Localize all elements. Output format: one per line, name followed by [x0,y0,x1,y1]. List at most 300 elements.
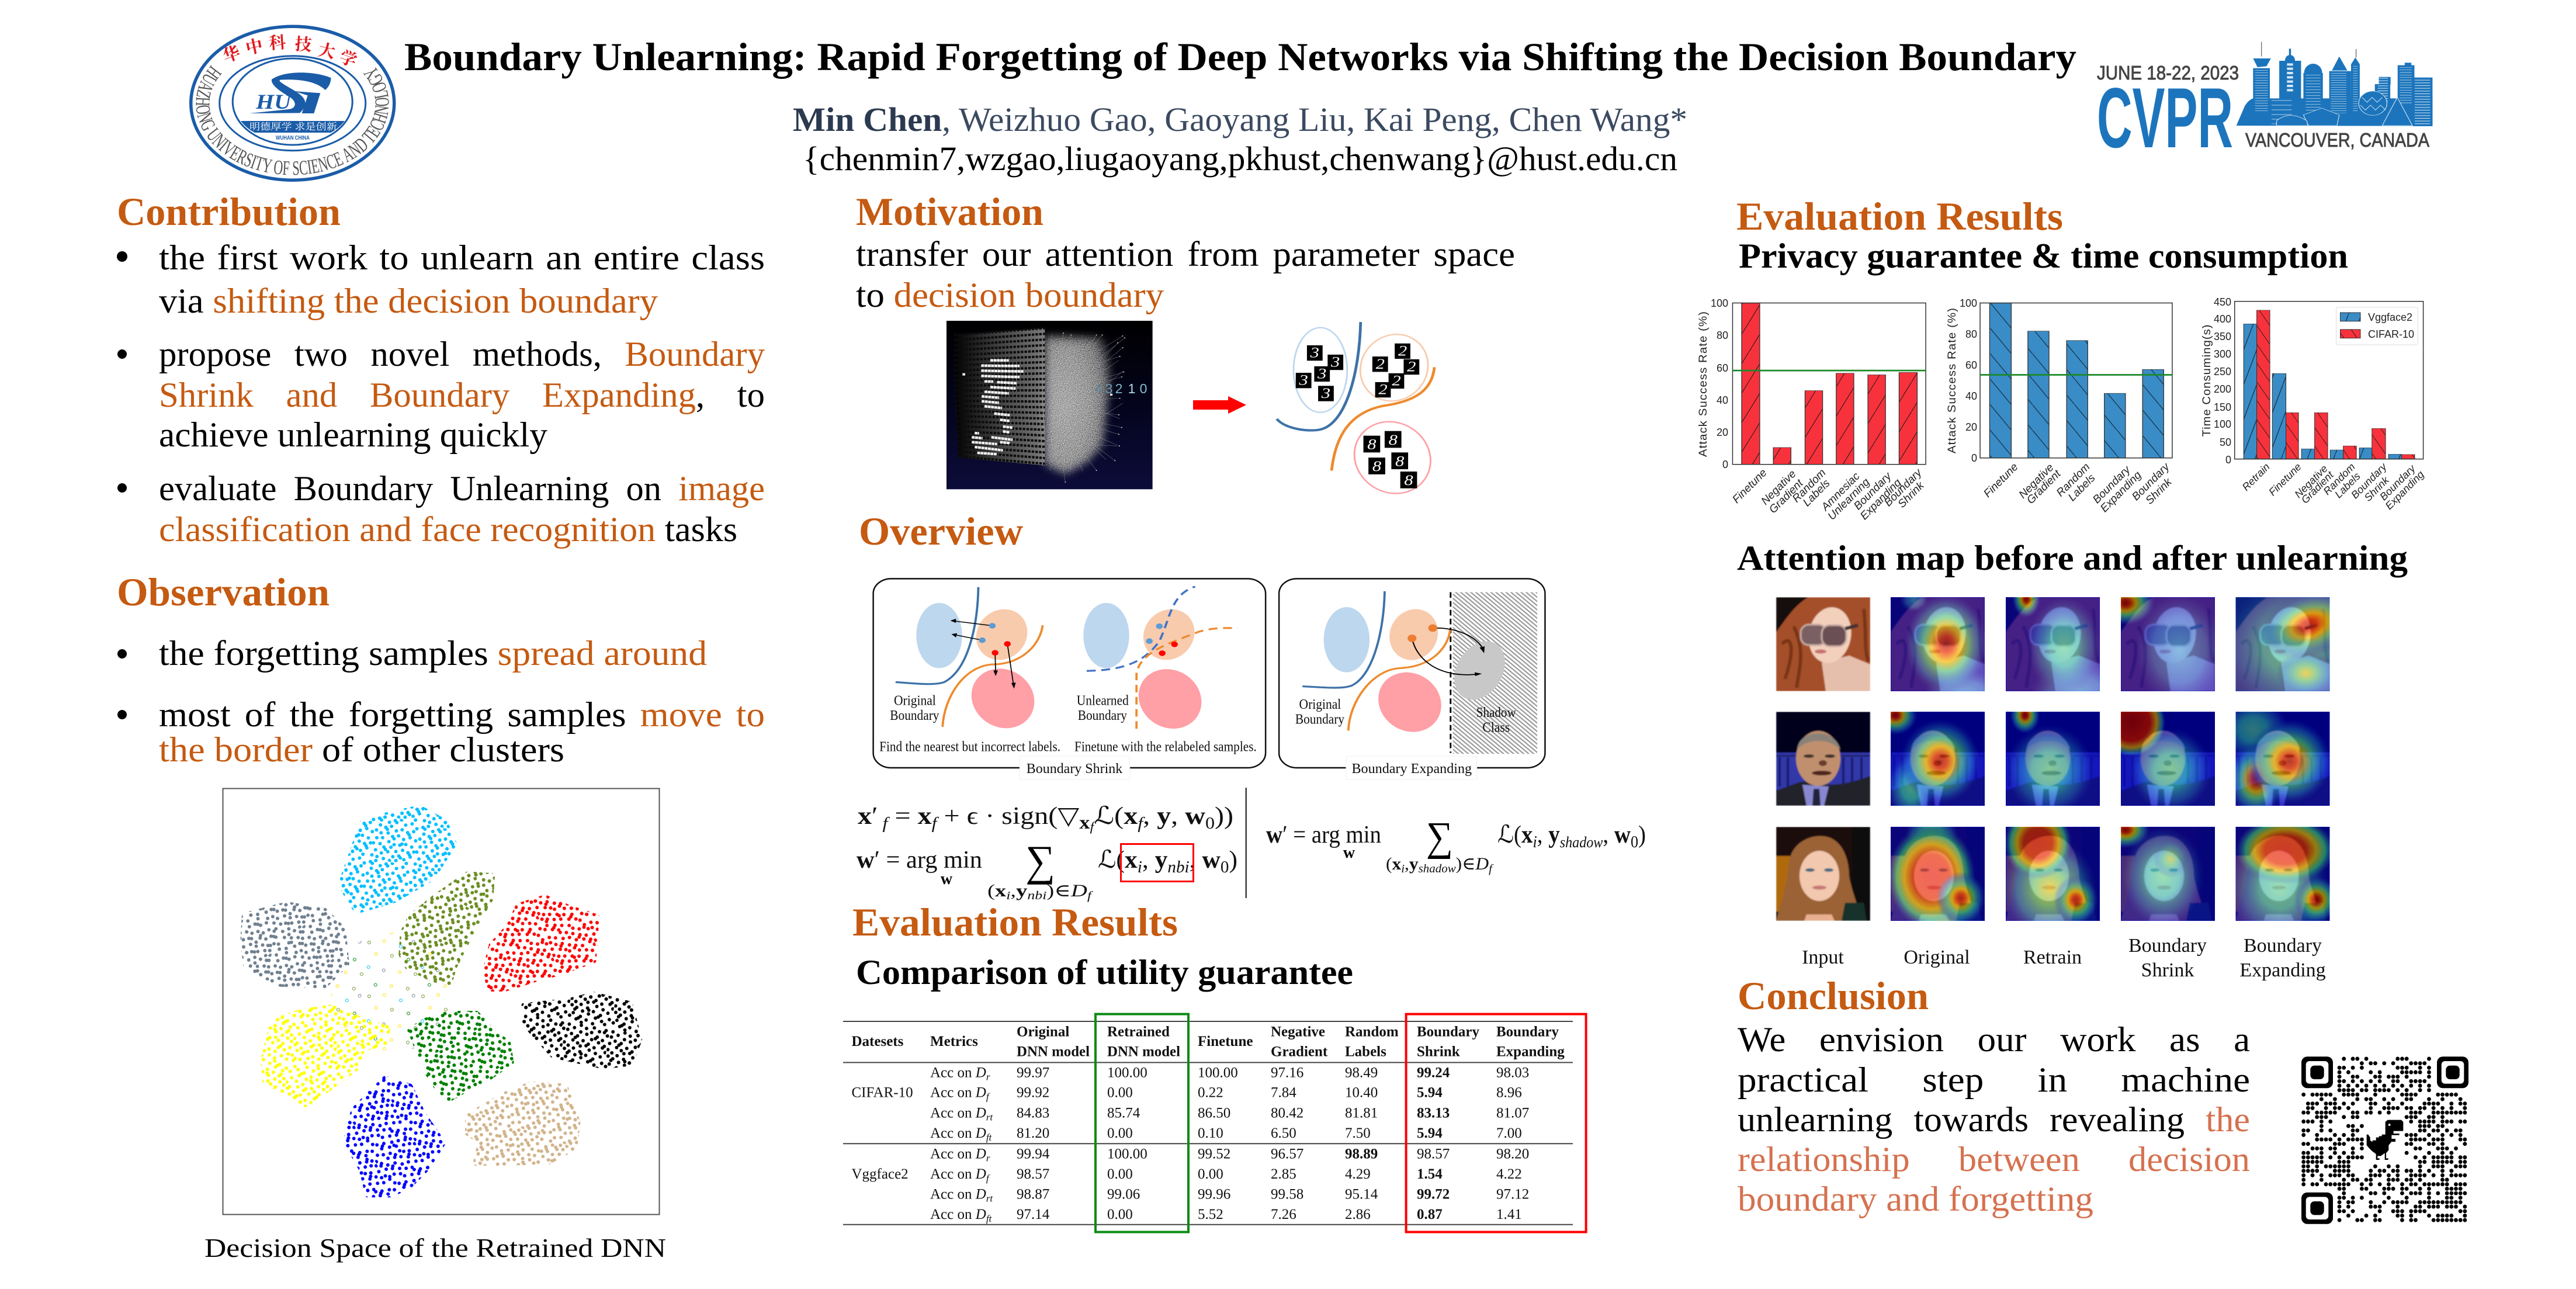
observation 2 [159,695,765,769]
figure: decision boundary clusters: 8 [1395,453,1404,470]
formula: boundary expanding: (x [1386,854,1400,874]
diagram: boundary shrink: Finetune with the relabeled samples. [1074,739,1257,754]
formulas: boundary shrink: )∈ [1046,881,1071,900]
figure: decision boundary clusters: 3 [1321,385,1330,401]
table: comparison of utility: 0.00 [1107,1207,1133,1222]
table: comparison of utility: 2.85 [1271,1166,1296,1182]
formula: boundary expanding: y [1409,854,1419,874]
formula: boundary expanding: shadow [1560,834,1603,851]
formulas: boundary shrink: , [1143,803,1157,830]
digit labels in network: 3 [1105,381,1112,396]
divider line [1246,788,1247,898]
attention row 3 [1776,807,2338,941]
chart 1: CIFAR-10 attack success rate: 100 [1711,297,1728,309]
formulas: boundary shrink: i [1138,858,1142,876]
table: comparison of utility: 98.49 [1345,1065,1378,1080]
conclusion text: unlearning towards revealing the [1738,1100,2250,1139]
chart 3: time consumption: Finetune [2266,461,2304,498]
chart 2: Vggface2 attack success rate: Gradient [2024,467,2064,507]
table: comparison of utility: 7.26 [1271,1207,1296,1222]
chart 2: Vggface2 attack success rate: Boundary [2130,460,2173,503]
panel: evaluation privacy [1697,194,2426,523]
formulas: boundary shrink: 0 [1205,815,1215,833]
table: comparison of utility: 86.50 [1198,1106,1230,1121]
table: comparison of utility: 2.86 [1345,1207,1371,1222]
formulas: boundary shrink: , [1010,881,1016,900]
heading: overview: Overview [859,509,1023,553]
table: comparison of utility: Acc on D [930,1186,986,1202]
attention column labels: Shrink [2141,959,2194,981]
formulas: boundary shrink: ∑ [1025,837,1055,885]
seal rings [191,26,394,180]
diagram: boundary expanding [1279,578,1545,779]
title: Boundary Unlearning: Rapid Forgetting of Deep Networks via Shifting the Decision Boundary [404,34,2076,79]
arrow [1193,396,1246,414]
table: comparison of utility: 97.16 [1271,1065,1303,1080]
bullet 3 text [159,469,765,549]
table: comparison of utility: Original [1017,1024,1069,1040]
bullet 2 text: propose two novel methods, Boundary [159,335,765,373]
conclusion text: boundary and forgetting [1738,1180,2093,1218]
panel: motivation [856,189,1515,502]
table: comparison of utility: 81.20 [1017,1125,1049,1141]
chart 1: CIFAR-10 attack success rate: Attack Success Rate (%) [1697,311,1710,457]
diagram: boundary shrink: Find the nearest but incorrect labels. [879,739,1060,754]
seal motto: 明德厚学 求是创新 [249,119,337,133]
digit labels in network [1095,381,1147,396]
table: comparison of utility: 81.81 [1345,1106,1378,1121]
formulas: boundary shrink: y, w [1157,803,1203,830]
highlight: boundary columns [1406,1014,1586,1232]
chart 2: Vggface2 attack success rate: Shrink [2144,476,2175,507]
chart 3: time consumption: Random [2321,461,2357,497]
table: comparison of utility: Acc on D [930,1166,986,1182]
table: comparison of utility: CIFAR-10 [852,1085,913,1101]
chart 2: Vggface2 attack success rate: Finetune [1981,461,2021,500]
chart 3: time consumption: 200 [2214,383,2231,395]
heading: motivation: Motivation [856,189,1043,234]
table: comparison of utility: Metrics [930,1034,978,1049]
chart legend: CIFAR-10 [2368,328,2414,340]
table: comparison of utility: 5.94 [1417,1085,1443,1101]
table: comparison of utility: 0.10 [1198,1125,1223,1141]
chart: t-SNE decision space scatter [223,789,659,1214]
formula: boundary expanding: i [1401,862,1405,875]
chart 3: time consumption: Expanding [2383,469,2426,512]
chart 3: time consumption: Shrink [2362,474,2392,504]
formulas: boundary shrink: nbi [1167,858,1190,876]
chart 3: time consumption: 400 [2214,313,2231,325]
bullet icons [117,251,127,493]
table: comparison of utility: 8.96 [1496,1085,1522,1101]
formula: boundary expanding: y [1548,822,1560,848]
table: comparison of utility: Labels [1345,1044,1386,1060]
table: comparison of utility: 97.12 [1496,1186,1529,1202]
chart 2: Vggface2 attack success rate: 0 [1971,452,1977,464]
digit labels in network: 2 [1115,381,1122,396]
figure: decision boundary clusters: 8 [1367,436,1377,453]
table: comparison of utility: Acc on D [930,1085,986,1101]
table: comparison of utility: DNN model [1017,1044,1090,1060]
bullet icons [117,649,127,719]
chart legend: Vggface2 [2368,311,2412,323]
bullet 1 text: the first work to unlearn an entire class [159,238,765,277]
table: comparison of utility: 7.00 [1496,1125,1522,1141]
logo wordmark: CVPR [2097,70,2233,165]
table: comparison of utility: 98.57 [1017,1166,1049,1182]
seal HUST mark [249,72,331,113]
chart 2: Vggface2 attack success rate [1946,297,2175,515]
heading: conclusion: Conclusion [1738,973,1929,1018]
panel: contribution [117,189,765,549]
attention row 1 [1776,579,2366,732]
panel: attention maps [1737,539,2408,981]
figure: decision boundary clusters: 2 [1398,343,1407,359]
diagram: boundary expanding: Original [1299,696,1341,712]
table: comparison of utility: 85.74 [1107,1106,1140,1121]
attention column labels: Retrain [2023,947,2082,968]
formula: boundary expanding: w [1343,844,1355,862]
table: comparison of utility: Negative [1271,1024,1325,1040]
subheading: attention map: Attention map before and after unlearning [1737,539,2408,577]
table: comparison of utility: 5.52 [1198,1207,1223,1222]
bullet 1 text: via shifting the decision boundary [159,282,658,320]
heading: contribution: Contribution [117,189,341,234]
table: comparison of utility: Acc on D [930,1207,986,1222]
table: comparison of utility: 84.83 [1017,1106,1049,1121]
figure: decision boundary clusters: 8 [1389,432,1398,448]
table: comparison of utility: 0.87 [1417,1207,1443,1222]
chart 1: CIFAR-10 attack success rate: Finetune [1730,467,1770,506]
emails: {chenmin7,wzgao,liugaoyang,pkhust,chenwang}@hust.edu.cn [803,140,1677,178]
formulas: boundary shrink: ℒ( [1094,803,1124,830]
formula: boundary expanding: w′ = arg min [1266,822,1381,848]
formula: boundary expanding: i [1533,833,1537,851]
formula: boundary expanding: ∑ [1426,815,1453,860]
formulas: boundary shrink: ) [1229,847,1237,874]
attention column labels [1802,935,2326,981]
observation 1: the forgetting samples spread around [159,634,707,673]
logo: CVPR 2023 Vancouver [2097,42,2432,165]
formulas: boundary shrink: y [1155,847,1167,874]
attention row 2 [1776,688,2331,820]
diagram: boundary expanding: Class [1482,719,1510,735]
figure: decision boundary clusters: 3 [1330,354,1340,370]
chart 3: time consumption: Retrain [2240,461,2272,493]
formula: boundary expanding: , [1603,822,1614,848]
table: comparison of utility: 98.57 [1417,1146,1450,1162]
table: comparison of utility: Vggface2 [852,1166,909,1182]
table: comparison of utility: 0.22 [1198,1085,1223,1101]
scatter caption: Decision Space of the Retrained DNN [204,1233,666,1263]
table: comparison of utility: 4.29 [1345,1166,1371,1182]
diagram: boundary expanding: Boundary [1295,711,1345,727]
chart 1: CIFAR-10 attack success rate: 80 [1717,330,1728,341]
attention column labels: Input [1802,947,1844,968]
formulas: boundary shrink: w′ = arg min [857,847,982,874]
chart 1: CIFAR-10 attack success rate: 60 [1717,362,1728,374]
chart 1: CIFAR-10 attack success rate: 20 [1717,427,1728,438]
seal Chinese name: 华中科技大学 [219,29,360,72]
formulas: boundary shrink: y [1016,881,1027,900]
QR modules [2304,1059,2465,1220]
table: comparison of utility: 0.00 [1107,1125,1133,1141]
chart 2: Vggface2 attack success rate: 80 [1965,328,1977,340]
formulas: boundary shrink: f [1138,815,1145,833]
seal English ring text: HUAZHONG UNIVERSITY OF SCIENCE AND TECHNOLOGY [196,65,389,175]
table: comparison of utility: 99.94 [1017,1146,1050,1162]
panel: observation [117,570,765,769]
chart 2: Vggface2 attack success rate: Random [2054,461,2093,499]
table: comparison of utility: Random [1345,1024,1399,1040]
table: comparison of utility: 99.58 [1271,1186,1303,1202]
table: comparison of utility: 100.00 [1107,1146,1147,1162]
table: comparison of utility: 99.96 [1198,1186,1230,1202]
table: comparison of utility: Boundary [1417,1024,1479,1040]
formulas: boundary shrink: = [887,803,918,830]
diagram: boundary shrink [873,578,1266,779]
figure: decision boundary clusters: 2 [1392,373,1401,389]
figure: decision boundary clusters: 2 [1378,382,1388,398]
motivation text [856,235,1515,314]
figure: decision boundary clusters [1277,322,1441,502]
table: comparison of utility: Gradient [1271,1044,1328,1060]
heading: evaluation results: Evaluation Results [1736,194,2063,238]
heading: evaluation results: Evaluation Results [852,900,1178,944]
formulas: boundary shrink: ℒ(x [1098,847,1137,874]
authors: Min Chen, Weizhuo Gao, Gaoyang Liu, Kai Peng, Chen Wang* [793,101,1687,138]
table: comparison of utility: 83.13 [1417,1106,1450,1121]
formulas: boundary shrink [857,803,1237,902]
seal motto band [241,121,345,133]
figure: decision boundary clusters: 2 [1407,359,1416,375]
formula: boundary expanding: f [1489,862,1494,875]
formulas: boundary shrink: (x [987,881,1004,900]
panel: overview [857,509,1646,902]
formulas: boundary shrink: f [1087,889,1093,902]
table: comparison of utility: 80.42 [1271,1106,1303,1121]
table: comparison of utility: 98.89 [1345,1146,1378,1162]
formulas: boundary shrink: i [1006,889,1010,902]
chart 1: CIFAR-10 attack success rate: Boundary [1852,470,1895,512]
formula: boundary expanding: ) [1638,822,1646,848]
formula: boundary expanding: ℒ(x [1497,822,1534,848]
chart 3: time consumption: Time Consuming(s) [2201,324,2213,437]
diagram: boundary shrink: Boundary Shrink [1027,760,1123,776]
digit labels in network: 1 [1128,381,1135,396]
conclusion text: We envision our work as a [1738,1020,2250,1059]
formulas: boundary shrink: )) [1215,803,1233,830]
formula: boundary expanding [1266,815,1646,875]
logo date: JUNE 18-22, 2023 [2097,62,2239,84]
table: comparison of utility: 100.00 [1198,1065,1238,1080]
scatter frame [223,789,659,1214]
chart 3: time consumption: 300 [2214,348,2231,360]
highlight box [1121,844,1193,881]
table: comparison of utility: 99.92 [1017,1085,1049,1101]
seal HU letters: HU [255,90,292,113]
table: comparison of utility: 98.20 [1496,1146,1529,1162]
table: comparison of utility: 99.97 [1017,1065,1049,1080]
logo location: VANCOUVER, CANADA [2245,129,2429,151]
chart 1: CIFAR-10 attack success rate: 0 [1722,459,1728,470]
chart 1: CIFAR-10 attack success rate [1697,297,1927,523]
formulas: boundary shrink: f [878,815,890,833]
table: comparison of utility: Finetune [1198,1034,1253,1049]
formula: boundary expanding: )∈ [1456,854,1475,874]
formulas: boundary shrink: x [1079,812,1090,833]
chart 1: CIFAR-10 attack success rate: Random [1790,467,1829,505]
table: comparison of utility: Retrained [1107,1024,1170,1040]
highlight: retrained column [1095,1014,1188,1232]
table: comparison of utility: Expanding [1496,1044,1565,1060]
chart 3: time consumption [2201,296,2426,512]
formulas: boundary shrink: w [1202,847,1221,874]
chart 1: CIFAR-10 attack success rate: Boundary [1882,466,1925,509]
panel: conclusion [1738,973,2250,1218]
observation 2: the border of other clusters [159,730,564,769]
chart 2: Vggface2 attack success rate: 60 [1965,359,1977,371]
heading: observation: Observation [117,570,330,614]
chart 3: time consumption: Gradient [2299,469,2336,506]
chart 1: CIFAR-10 attack success rate: Shrink [1896,479,1927,511]
chart 1: CIFAR-10 attack success rate: Labels [1801,477,1833,509]
scatter clusters [242,807,640,1195]
table: comparison of utility: 4.22 [1496,1166,1522,1182]
attention column labels: Expanding [2239,959,2326,981]
chart 2: Vggface2 attack success rate: 20 [1965,421,1977,433]
chart 1: CIFAR-10 attack success rate: Unlearning [1826,476,1873,523]
logo: HUST university seal [189,25,396,182]
icon: dinosaur [2367,1120,2403,1160]
table: comparison of utility: Acc on D [930,1106,986,1121]
seal city: WUHAN CHINA [276,135,310,141]
diagram: boundary shrink: Boundary [890,707,939,723]
bullet 2 text: achieve unlearning quickly [159,415,547,454]
digit labels in network: 4 [1095,381,1102,396]
formula: boundary expanding: w [1614,822,1631,848]
table: comparison of utility: 99.52 [1198,1146,1230,1162]
figure: decision boundary clusters: 8 [1404,472,1413,488]
formulas: boundary shrink: , [1142,847,1155,874]
digit labels in network: 0 [1140,381,1147,396]
table: comparison of utility: DNN model [1107,1044,1180,1060]
conclusion text [1738,1020,2250,1218]
table: comparison of utility: Datesets [852,1034,904,1049]
attention column labels: Original [1904,947,1970,968]
motivation text: transfer our attention from parameter space [856,235,1515,273]
diagram: boundary expanding: Shadow [1476,704,1516,720]
chart legend [2368,311,2414,340]
formulas: boundary shrink: x [1124,803,1138,830]
table: comparison of utility: 0.00 [1198,1166,1223,1182]
table: comparison of utility: 99.72 [1417,1186,1450,1202]
chart 2: Vggface2 attack success rate: Negative [2017,462,2057,501]
table: comparison of utility: 100.00 [1107,1065,1147,1080]
table: comparison of utility: Shrink [1417,1044,1460,1060]
chart 3: time consumption: 100 [2214,418,2231,430]
chart 2: Vggface2 attack success rate: 100 [1960,297,1977,309]
table: comparison of utility: f [986,1092,990,1103]
chart 2: Vggface2 attack success rate: Boundary [2090,463,2134,506]
figure: decision boundary clusters: 3 [1317,366,1326,382]
table: comparison of utility: rt [986,1193,993,1204]
table: comparison of utility: ft [986,1132,993,1143]
QR finder patterns [2301,1056,2468,1224]
formulas: boundary shrink: D [1070,881,1087,900]
chart 1: CIFAR-10 attack success rate: Amnesiac [1819,470,1863,514]
table: comparison of utility: 0.00 [1107,1166,1133,1182]
observation 2: most of the forgetting samples move to [159,695,765,734]
conclusion text: relationship between decision [1738,1140,2250,1179]
formulas: boundary shrink: x′ [858,803,877,830]
bullet 1 text [159,238,765,320]
table: comparison of utility: 97.14 [1017,1207,1050,1222]
chart 3: time consumption: Negative [2292,463,2330,500]
chart 2: Vggface2 attack success rate: 40 [1965,390,1977,402]
figure: decision boundary clusters: 3 [1298,372,1308,389]
table: comparison of utility: 95.14 [1345,1186,1378,1202]
formula: boundary expanding: , [1405,854,1409,874]
chart 3: time consumption: 450 [2214,296,2231,308]
motivation text: to decision boundary [856,276,1164,314]
table: comparison of utility: 98.87 [1017,1186,1049,1202]
formula: boundary expanding: 0 [1631,833,1638,851]
conclusion text: practical step in machine [1738,1061,2250,1099]
chart 1: CIFAR-10 attack success rate: 40 [1717,394,1728,406]
table: comparison of utility: 1.41 [1496,1207,1522,1222]
table: comparison of utility: 10.40 [1345,1085,1378,1101]
bullet 2 text [159,335,765,454]
table: comparison of utility: Acc on D [930,1065,986,1080]
table: comparison of utility: 81.07 [1496,1106,1529,1121]
formulas: boundary shrink: f [932,815,939,833]
table: comparison of utility [843,1014,1586,1232]
formulas: boundary shrink: nbi [1027,889,1046,902]
icon: Vancouver skyline [2237,42,2432,126]
diagram: boundary shrink: Boundary [1078,707,1128,723]
formulas: boundary shrink: , [1190,847,1202,874]
chart 3: time consumption: 350 [2214,331,2231,342]
formulas: boundary shrink: x [918,803,932,830]
diagram: boundary shrink: Original [894,692,936,708]
formula: boundary expanding: D [1475,854,1489,874]
chart 1: CIFAR-10 attack success rate: Gradient [1767,477,1806,516]
table: comparison of utility: r [986,1153,990,1164]
chart 3: time consumption: 150 [2214,401,2231,413]
formula: boundary expanding: , [1537,822,1548,848]
bullet 3 text: evaluate Boundary Unlearning on image [159,469,765,508]
figure: decision boundary clusters: 8 [1372,458,1381,475]
table: comparison of utility: 96.57 [1271,1146,1303,1162]
attention column labels: Boundary [2128,935,2207,957]
table: comparison of utility: rt [986,1111,993,1123]
bullet 2 text: Shrink and Boundary Expanding, to [159,376,765,414]
attention column labels: Boundary [2244,935,2322,957]
chart 3: time consumption: 250 [2214,366,2231,377]
table: comparison of utility: f [986,1173,990,1184]
figure: 3D parameter space network [947,321,1153,489]
diagram: boundary expanding: Boundary Expanding [1351,760,1472,776]
chart 3: time consumption: Boundary [2377,462,2418,503]
chart 3: time consumption: Boundary [2349,460,2390,501]
chart 3: time consumption: Labels [2332,470,2363,500]
table: comparison of utility: 99.24 [1417,1065,1450,1080]
table: comparison of utility: 7.84 [1271,1085,1296,1101]
chart 2: Vggface2 attack success rate: Attack Success Rate (%) [1946,307,1958,453]
formulas: boundary shrink: f [1090,819,1096,834]
subheading: utility: Comparison of utility guarantee [856,953,1353,992]
